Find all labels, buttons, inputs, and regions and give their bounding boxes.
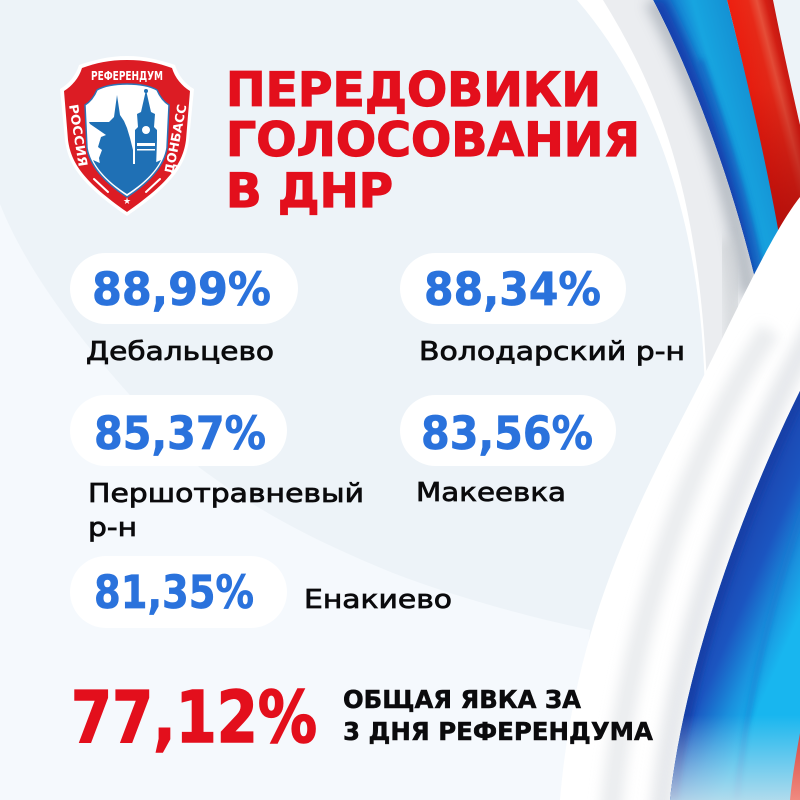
title: ПЕРЕДОВИКИ	[226, 63, 601, 118]
ribbon band: lower blue	[660, 385, 800, 800]
background lighter sweep	[0, 204, 590, 800]
title: ГОЛОСОВАНИЯ	[226, 113, 640, 168]
stat: Дебальцево: 88,99%	[92, 263, 271, 316]
shield text: РЕФЕРЕНДУМ: РЕФЕРЕНДУМ	[91, 68, 163, 83]
stat: Володарский р-н: 88,34%	[424, 263, 601, 316]
ribbon band: white	[577, 0, 754, 374]
stat: Макеевка: 83,56%	[421, 407, 593, 460]
ribbon: upper tricolor	[577, 0, 800, 374]
stat: Першотравневый р-н: 85,37%	[94, 407, 266, 460]
stat: Дебальцево	[70, 253, 298, 367]
shield blue ground	[93, 160, 161, 194]
shield inner white field	[85, 84, 169, 197]
stat: Макеевка	[400, 395, 616, 508]
stat: Першотравневый р-н: р-н	[88, 513, 137, 543]
stat: Енакиево: 81,35%	[94, 566, 254, 619]
ribbon band: blue	[653, 0, 780, 295]
shield white dashes	[94, 179, 160, 192]
total turnout figure: 77,12%	[71, 676, 317, 759]
shield red body	[64, 60, 190, 212]
ribbon band: red	[727, 0, 800, 250]
total turnout caption: ОБЩАЯ ЯВКА ЗА	[343, 685, 581, 714]
stat: Першотравневый р-н	[70, 395, 364, 543]
title: В ДНР	[226, 164, 393, 219]
stat: Макеевка: Макеевка	[416, 478, 566, 508]
stat: Володарский р-н: Володарский р-н	[419, 337, 685, 367]
ribbon tip: red	[790, 733, 800, 800]
logo: referendum shield	[60, 56, 194, 216]
shield star: ★	[123, 197, 131, 207]
shield text: ДОНБАСС: ДОНБАСС	[161, 103, 189, 176]
stat: Першотравневый р-н: Першотравневый	[88, 479, 364, 509]
stat: Енакиево	[70, 556, 452, 628]
icon: kremlin tower	[135, 89, 157, 168]
stat: Володарский р-н	[400, 253, 685, 367]
ribbon band: front white	[560, 197, 800, 800]
stat: Дебальцево: Дебальцево	[86, 337, 274, 367]
icon: motherland monument	[89, 95, 133, 170]
title	[226, 63, 640, 219]
shield text: РОССИЯ: РОССИЯ	[66, 103, 91, 168]
ribbon: lower tricolor	[560, 197, 800, 800]
stat: Енакиево: Енакиево	[304, 585, 452, 615]
shield outer white edge	[60, 56, 194, 216]
total turnout caption	[343, 685, 653, 746]
total turnout caption: 3 ДНЯ РЕФЕРЕНДУМА	[343, 717, 653, 746]
